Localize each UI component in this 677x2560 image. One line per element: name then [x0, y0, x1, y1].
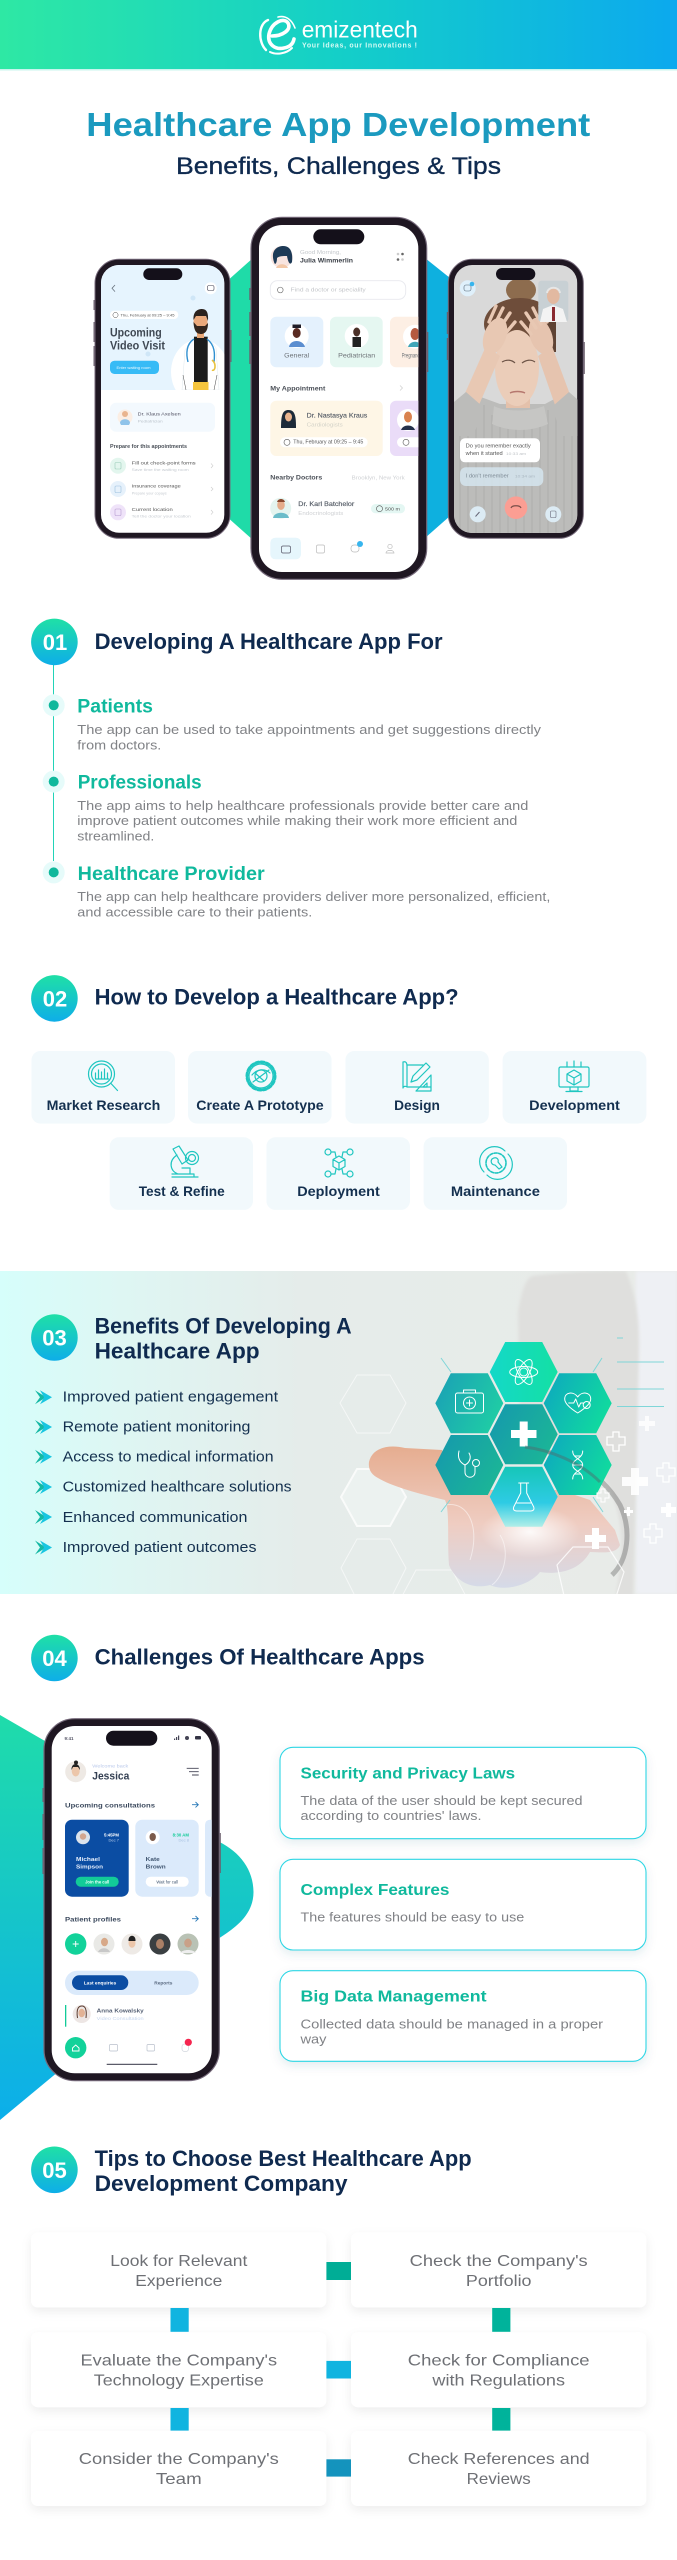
item: professionals: Professionals	[78, 773, 202, 794]
phone: centre home screen: Cardiologists	[307, 423, 343, 429]
tip: references	[351, 2431, 646, 2506]
tip: team	[31, 2431, 326, 2506]
face	[506, 398, 530, 408]
icon: magnifier	[88, 1061, 118, 1090]
item: professionals: The app aims to help healthcare professionals provide better care and	[77, 798, 528, 813]
nearby doctors: Nearby Doctors	[270, 474, 323, 481]
card: deployment	[266, 1137, 410, 1210]
phone: patient app: Brown	[146, 1865, 166, 1871]
greeting	[65, 1761, 86, 1782]
phone: upcoming video visit: Prepare for this appointments	[110, 444, 187, 450]
item: healthcare provider: and accessible care to their patients.	[77, 904, 312, 919]
number badge 03: 03	[42, 1326, 67, 1350]
phone: centre home screen: Dr. Karl Batchelor	[298, 501, 354, 508]
section 05: tips	[31, 2146, 646, 2506]
hero: three app phones on a hexagon	[94, 217, 585, 579]
card: big data management: Collected data should be managed in a proper	[300, 2016, 604, 2031]
heading: Tips to Choose Best Healthcare App	[95, 2146, 472, 2171]
card: big data management	[280, 1971, 646, 2061]
phone: centre home screen: General	[284, 354, 309, 360]
card: create a prototype: Create A Prototype	[196, 1097, 324, 1113]
hex: flask	[490, 1467, 558, 1527]
section 01: developing a healthcare app for	[31, 619, 550, 919]
sleeve photo area	[518, 1271, 677, 1600]
phone: patient app: Wait for call	[156, 1879, 178, 1884]
phone: patient app	[42, 1719, 221, 2081]
card: test & refine: Test & Refine	[139, 1183, 225, 1199]
heading	[95, 1313, 352, 1364]
phone: upcoming video visit: Save time the waiting room	[132, 467, 189, 472]
hex: heart	[544, 1373, 612, 1433]
phone: right video call: 10:33 am	[506, 451, 527, 456]
tip: references: Check References and	[408, 2451, 590, 2468]
number badge 01: 01	[43, 630, 67, 655]
tip: compliance	[351, 2332, 646, 2407]
card: security and privacy: according to countries' laws.	[300, 1808, 482, 1823]
search box	[270, 281, 406, 299]
category cards	[270, 317, 323, 367]
heading: How to Develop a Healthcare App?	[95, 985, 459, 1010]
connector ticks	[441, 1338, 664, 1512]
icon: gear and wrench	[480, 1147, 512, 1179]
card: market research: Market Research	[47, 1097, 160, 1113]
phone: centre home screen: Julia Wimmerlin	[300, 258, 353, 265]
phone: centre home screen: Brooklyn, New York	[352, 475, 405, 481]
dark curve over hexes	[525, 1447, 600, 1482]
benefit: outcomes: Improved patient outcomes	[63, 1539, 256, 1556]
card: complex features: The features should be easy to use	[300, 1910, 524, 1925]
card: maintenance: Maintenance	[451, 1183, 540, 1199]
phone: right video call: when it started	[466, 451, 503, 457]
timeline line	[53, 660, 54, 861]
benefit: remote: Remote patient monitoring	[63, 1419, 250, 1436]
tip: portfolio	[351, 2232, 646, 2308]
upcoming consultations: Upcoming consultations	[65, 1802, 155, 1809]
card: security and privacy	[280, 1747, 646, 1839]
arms and hands	[462, 314, 572, 405]
bottom nav	[65, 2037, 86, 2058]
tip: relevant experience	[31, 2232, 326, 2308]
phone: centre home screen: Dr. Nastasya Kraus	[307, 412, 367, 419]
item: patients: from doctors.	[77, 737, 161, 752]
phone: upcoming video visit: Prepare your copays	[132, 490, 167, 495]
connectors between tips	[170, 2262, 510, 2477]
phone: patient app: Dec 8	[179, 1838, 190, 1843]
item: patients	[43, 694, 542, 752]
hair	[506, 280, 536, 300]
number badge 04	[31, 1635, 78, 1681]
item: patients: The app can be used to take appointments and get suggestions directly	[77, 722, 542, 737]
icon: blueprint and pencil	[403, 1062, 431, 1091]
top chat button	[460, 280, 476, 296]
dark wrist curve	[548, 1450, 630, 1577]
chat bubble: answer	[460, 467, 543, 486]
phone: patient app: Dec 7	[109, 1838, 120, 1843]
card: market research	[32, 1051, 175, 1124]
tip: technology expertise: Technology Expertise	[94, 2372, 264, 2389]
user greeting	[271, 246, 293, 268]
tip: compliance: with Regulations	[431, 2372, 565, 2389]
hexagon cluster	[435, 1338, 664, 1527]
number badge 03	[31, 1314, 78, 1361]
logo: emizentech: emizentech	[302, 17, 418, 43]
card: design: Design	[394, 1097, 440, 1113]
benefit: communication: Enhanced communication	[63, 1509, 247, 1526]
phone: patient app: Anna Kowalsky	[97, 2008, 145, 2014]
card: security and privacy: The data of the user should be kept secured	[300, 1793, 582, 1808]
icon: network cube	[325, 1149, 353, 1177]
tip: relevant experience: Experience	[135, 2273, 222, 2290]
phone: upcoming video visit: Video Visit	[110, 338, 165, 352]
card: development: Development	[529, 1097, 620, 1113]
phone: upcoming video visit: Upcoming	[110, 326, 162, 340]
phone: patient app: 5:45PM	[104, 1832, 119, 1837]
number badge 01	[31, 619, 78, 665]
appointment row: My Appointment	[270, 385, 326, 392]
number badge 02: 02	[43, 986, 67, 1012]
card: complex features	[280, 1859, 646, 1950]
hex: cross	[490, 1404, 558, 1464]
blue hexagon side	[425, 258, 450, 538]
tip: team: Consider the Company's	[79, 2451, 279, 2468]
logo: emizentech: Your Ideas, our Innovations !	[302, 43, 417, 50]
phone: upcoming video visit: Tell the doctor your location	[132, 514, 191, 519]
tip: portfolio: Check the Company's	[410, 2253, 588, 2270]
benefit: engagement: Improved patient engagement	[63, 1389, 279, 1406]
item: healthcare provider: Healthcare Provider	[78, 864, 265, 885]
phone: patient app: Welcome back	[92, 1763, 129, 1769]
item: professionals: streamlined.	[77, 828, 154, 844]
phone: right video call	[447, 259, 585, 538]
number badge 04: 04	[42, 1646, 67, 1671]
phone: upcoming video visit: Current location	[132, 507, 173, 513]
heading: Healthcare App	[95, 1339, 260, 1364]
icon: gear	[247, 1062, 275, 1090]
logo icon	[260, 17, 295, 54]
phone: upcoming video visit: Insurance coverage	[132, 484, 181, 490]
card: development	[503, 1051, 646, 1124]
phone: centre home screen: Pediatrician	[338, 354, 375, 360]
hex: medical bag	[435, 1373, 503, 1433]
phone: patient app: Reports	[154, 1980, 173, 1986]
card: create a prototype	[188, 1051, 332, 1124]
card: maintenance	[424, 1137, 567, 1210]
heading: Benefits Of Developing A	[95, 1313, 352, 1338]
item: healthcare provider: The app can help healthcare providers deliver more personalized, efficient,	[77, 889, 550, 904]
phone: upcoming video visit: Thu, February at 09:25 – 9:45	[120, 313, 175, 318]
card: complex features: Complex Features	[300, 1882, 450, 1899]
section 03: benefits band	[0, 1271, 677, 1600]
phone: right video call: I don't remember	[466, 474, 509, 480]
phone: upcoming video visit: Enter waiting room	[116, 365, 151, 370]
phone: upcoming video visit: Fill out check-point forms	[132, 460, 196, 466]
heading: Development Company	[95, 2171, 348, 2196]
phone: right video call: Do you remember exactly	[466, 444, 531, 450]
card: design	[345, 1051, 489, 1124]
chat bubble: question	[460, 438, 540, 462]
green hexagon side	[226, 258, 253, 540]
phone: patient app: 9:41	[64, 1736, 74, 1742]
phone: patient app: 8:30 AM	[173, 1832, 189, 1837]
phone: patient app: Video Consultation	[97, 2016, 144, 2021]
benefit: customized: Customized healthcare solutions	[63, 1479, 292, 1496]
tab bar	[270, 538, 301, 559]
card: test & refine	[110, 1137, 253, 1210]
phone: patient app: Join the call	[85, 1879, 109, 1884]
icon: microscope	[171, 1146, 198, 1177]
phone: patient app: Jessica	[92, 1770, 130, 1782]
phone: patient app: Kate	[146, 1857, 160, 1863]
heading: Challenges Of Healthcare Apps	[95, 1645, 425, 1670]
phone: patient app: Michael	[76, 1857, 101, 1863]
item: healthcare provider	[43, 861, 550, 919]
tip: compliance: Check for Compliance	[408, 2352, 590, 2370]
phone: upcoming video visit: Pediatrician	[138, 418, 163, 423]
number badge 05	[31, 2146, 78, 2193]
doctor illustration	[171, 309, 224, 390]
tabs	[65, 1971, 199, 1995]
phone: upcoming video visit	[94, 259, 232, 538]
subtitle: Benefits, Challenges & Tips	[176, 153, 501, 180]
card: big data management: Big Data Management	[300, 1989, 487, 2006]
tip: references: Reviews	[467, 2471, 531, 2488]
tip: portfolio: Portfolio	[466, 2273, 532, 2290]
gradient blob behind phone	[0, 1715, 254, 2120]
inset doctor	[538, 281, 568, 322]
hex: stethoscope	[435, 1435, 503, 1495]
hex: atom	[490, 1342, 558, 1402]
heading	[95, 2146, 472, 2196]
phone: patient app: Last enquiries	[84, 1980, 117, 1986]
logo: emizentech	[260, 17, 418, 54]
card: security and privacy: Security and Privacy Laws	[300, 1765, 515, 1782]
patient profiles: Patient profiles	[65, 1916, 121, 1923]
phone: centre home screen: Pregnancy	[402, 354, 422, 360]
item: professionals	[43, 771, 528, 844]
section 02: how to develop	[31, 975, 646, 1210]
call buttons	[505, 496, 527, 519]
tip: team: Team	[156, 2471, 202, 2488]
hand	[369, 1447, 620, 1588]
item: patients: Patients	[77, 696, 153, 717]
phone: right video call: 10:34 am	[515, 474, 536, 479]
phone: centre home screen: Endocrinologists	[298, 511, 344, 517]
section 04: challenges	[0, 1635, 646, 2120]
decorative crosses	[557, 1416, 676, 1600]
benefits list	[35, 1389, 292, 1556]
phone: centre home screen: Good Morning,	[300, 250, 342, 256]
card: big data management: way	[299, 2031, 327, 2046]
band background	[0, 1271, 677, 1594]
title: Healthcare App Development	[86, 106, 590, 143]
tip: technology expertise: Evaluate the Company's	[81, 2352, 277, 2370]
sweater	[454, 396, 578, 533]
benefit: access: Access to medical information	[63, 1448, 274, 1465]
icon: monitor with cube	[559, 1061, 589, 1092]
sweater sleeves	[454, 392, 482, 436]
card: deployment: Deployment	[297, 1183, 380, 1199]
tip: technology expertise	[31, 2332, 326, 2407]
number badge 05: 05	[42, 2158, 67, 2183]
item: professionals: improve patient outcomes while making their work more efficient and	[77, 813, 517, 828]
title	[86, 106, 590, 180]
hex: dna	[544, 1435, 612, 1495]
phone: centre home screen: Thu, February at 09:25 – 9:45	[293, 440, 364, 446]
phone: patient app: Simpson	[76, 1865, 104, 1871]
tip: relevant experience: Look for Relevant	[110, 2253, 248, 2270]
turtleneck collar	[492, 406, 548, 430]
phone: centre home screen: 500 m	[385, 506, 400, 512]
header bar	[0, 0, 677, 70]
phone: centre home screen	[249, 217, 430, 579]
phone: centre home screen: Find a doctor or speciality	[291, 288, 366, 294]
number badge 02	[31, 975, 78, 1022]
enquiry row	[65, 2005, 66, 2027]
phone: upcoming video visit: Dr. Klaus Axelsen	[138, 412, 181, 418]
decorative hexagon outlines	[340, 1375, 468, 1600]
heading: Developing A Healthcare App For	[95, 629, 443, 654]
